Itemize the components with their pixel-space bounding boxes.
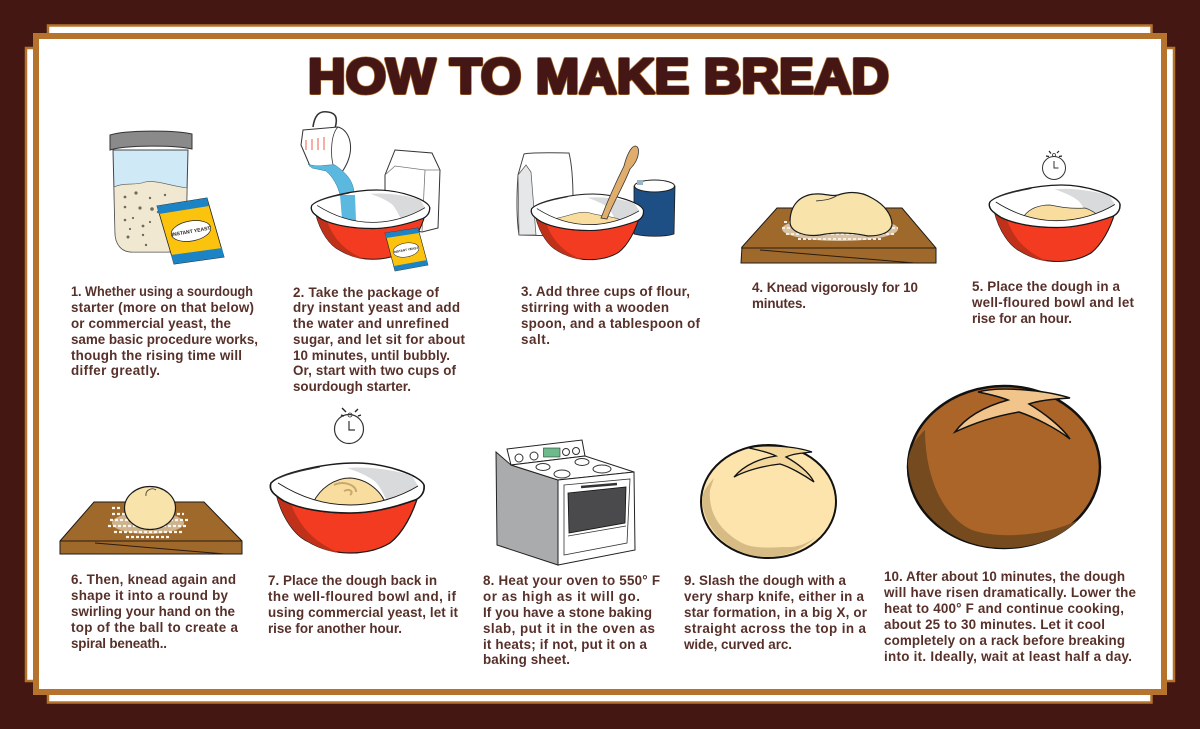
text: step 8: or as high as it will go. (483, 589, 640, 604)
panel: step 4 (741, 193, 936, 311)
icon: flour dusting (108, 508, 190, 537)
icon: timer clock (334, 408, 364, 444)
text: step 2 (293, 285, 466, 394)
icon: measuring cup pouring water (301, 112, 357, 221)
text: step 9: straight across the top in a (684, 621, 867, 636)
icon: dough ball (124, 486, 176, 530)
text: step 2: 10 minutes, until bubbly. (293, 348, 450, 363)
text: step 1: differ greatly. (71, 363, 160, 378)
icon: oven (496, 440, 635, 565)
text: step 9: very sharp knife, either in a (684, 589, 865, 604)
icon: blue salt canister (634, 180, 675, 236)
text: step 10: will have risen dramatically. Lower the (883, 585, 1136, 600)
text: step 1: same basic procedure works, (71, 332, 258, 347)
text: step 1: starter (more on that below) (71, 300, 254, 315)
panel: step 9 (683, 445, 868, 652)
text: step 10: 10. After about 10 minutes, the dough (884, 569, 1125, 584)
text: step 10: about 25 to 30 minutes. Let it cool (884, 617, 1105, 632)
text: step 9: wide, curved arc. (683, 637, 792, 652)
icon: wooden spoon (601, 146, 638, 219)
text: step 6: swirling your hand on the (71, 604, 235, 619)
text: step 7: using commercial yeast, let it (268, 605, 459, 620)
text: step 2: Or, start with two cups of (293, 363, 457, 378)
text: step 1: 1. Whether using a sourdough (71, 284, 253, 299)
text: step 8: If you have a stone baking (483, 605, 652, 620)
text: step 10: completely on a rack before breaking (884, 633, 1125, 648)
text: step 2: 2. Take the package of (293, 285, 440, 300)
text: step 3: stirring with a wooden (521, 300, 669, 315)
icon: wooden board (60, 502, 242, 554)
text: step 9 (683, 573, 868, 652)
title: HOW TO MAKE BREAD (308, 50, 889, 104)
text: step 8: it heats; if not, put it on a (483, 637, 648, 652)
text: step 10: heat to 400° F and continue cooking, (884, 601, 1124, 616)
text: step 5: well-floured bowl and let (971, 295, 1135, 310)
icon: flour bag (517, 153, 573, 236)
icon: instant yeast packet: INSTANT YEAST (171, 226, 211, 238)
icon: flour bag (385, 150, 440, 232)
text: step 2: dry instant yeast and add (293, 300, 460, 315)
text: step 5: 5. Place the dough in a (972, 279, 1121, 294)
text: step 6: spiral beneath.. (71, 636, 167, 651)
text: step 7: rise for another hour. (268, 621, 402, 636)
icon: bowl with dough (270, 463, 424, 553)
icon: baked loaf (908, 386, 1100, 548)
panel: step 1 (71, 131, 258, 378)
text: step 3: salt. (521, 332, 550, 347)
text: step 7: 7. Place the dough back in (268, 573, 437, 588)
text: step 3: 3. Add three cups of flour, (521, 284, 690, 299)
text: step 1: or commercial yeast, the (71, 316, 231, 331)
panel: step 7 (268, 408, 459, 636)
icon: sourdough starter jar (110, 131, 192, 252)
text: step 10: into it. Ideally, wait at least half a day. (884, 649, 1132, 664)
text: step 8 (483, 573, 660, 667)
icon: kneaded dough (790, 193, 892, 236)
panel: step 8 (483, 440, 660, 667)
panel: step 6 (60, 486, 242, 651)
panel: step 5 (971, 151, 1135, 326)
icon: flour dusting (782, 217, 898, 241)
text: step 7: the well-floured bowl and, if (268, 589, 457, 604)
text: step 3: spoon, and a tablespoon of (521, 316, 701, 331)
icon: instant yeast packet (157, 198, 224, 264)
text: step 1: though the rising time will (71, 348, 242, 363)
text: step 9: star formation, in a big X, or (684, 605, 868, 620)
panel: step 2 (293, 112, 466, 394)
text: step 4: minutes. (752, 296, 806, 311)
text: step 6: 6. Then, knead again and (71, 572, 236, 587)
text: step 2: sourdough starter. (293, 379, 411, 394)
text: step 6 (71, 572, 239, 651)
text: step 3 (521, 284, 701, 347)
text: step 10 (883, 569, 1136, 664)
icon: timer clock (1042, 151, 1066, 180)
text: step 4: 4. Knead vigorously for 10 (752, 280, 918, 295)
text: step 9: 9. Slash the dough with a (684, 573, 847, 588)
icon: wooden board (741, 208, 936, 263)
text: step 6: top of the ball to create a (71, 620, 239, 635)
icon: slashed dough (701, 445, 836, 558)
icon: bowl with dough (989, 185, 1120, 262)
panel: step 10 (883, 386, 1136, 664)
text: step 8: 8. Heat your oven to 550° F (483, 573, 660, 588)
text: step 8: slab, put it in the oven as (483, 621, 655, 636)
text: step 4 (752, 280, 918, 311)
text: step 8: baking sheet. (483, 652, 570, 667)
text: step 1 (71, 284, 258, 378)
icon: yeast packet: INSTANT YEAST (393, 246, 419, 254)
text: step 2: sugar, and let sit for about (293, 332, 466, 347)
icon: mixing bowl with dough (531, 194, 644, 260)
text: step 6: shape it into a round by (71, 588, 229, 603)
text: step 2: the water and unrefined (293, 316, 449, 331)
text: step 5: rise for an hour. (972, 311, 1072, 326)
icon: yeast packet (385, 228, 428, 271)
text: step 7 (268, 573, 459, 636)
text: step 5 (971, 279, 1135, 326)
panel: step 3 (517, 146, 701, 347)
icon: red mixing bowl (311, 190, 430, 259)
